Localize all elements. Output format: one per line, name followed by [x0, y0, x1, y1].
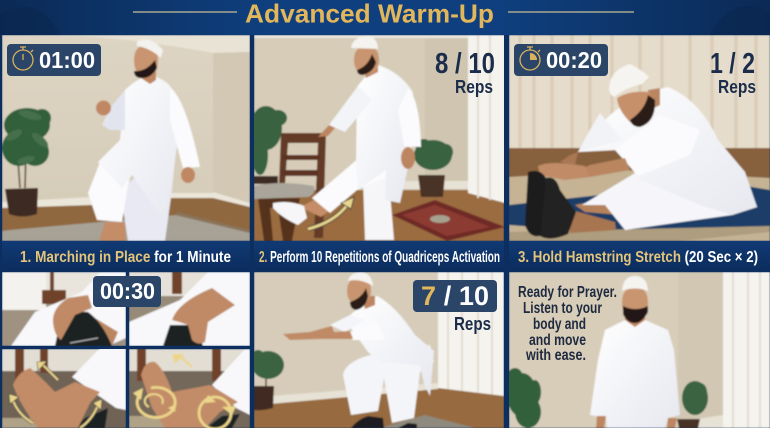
- timer badge: 00:20: 00:20: [546, 47, 602, 73]
- closing message: Listen to your: [523, 300, 602, 317]
- rep counter: 8 / 10: Reps: [455, 77, 493, 97]
- caption: step 1: [2, 241, 250, 270]
- closing message: and move: [529, 332, 586, 349]
- closing message: Ready for Prayer.: [518, 284, 617, 301]
- arrows: right foot circles: [133, 354, 236, 428]
- sub-panel: hand on left foot: [2, 272, 126, 346]
- caption: step 3: 3. Hold Hamstring Stretch (20 Sec × 2): [518, 249, 758, 266]
- figure: standing man: [590, 276, 680, 428]
- timer badge: 00:20: [514, 44, 608, 76]
- caption: step 1: 1. Marching in Place for 1 Minute: [20, 249, 231, 266]
- closing message: with ease.: [525, 347, 586, 364]
- panel: quadriceps activation: [250, 35, 505, 270]
- panel: ankle mobility grid: [2, 272, 250, 428]
- closing message: [518, 284, 617, 364]
- header banner: [0, 0, 770, 35]
- rep counter badge: 7 / 10: 7 / 10: [421, 281, 489, 311]
- figure: man raising leg: [273, 36, 421, 240]
- arrow: leg raise: [308, 197, 354, 229]
- panel: marching in place: [2, 35, 250, 270]
- caption: step 2: [254, 241, 504, 270]
- icon: stopwatch with quarter fill: [520, 47, 540, 70]
- caption: step 3: [509, 241, 770, 270]
- rep counter: 1 / 2: Reps: [718, 77, 756, 97]
- figure: seated man stretching: [525, 64, 757, 239]
- panel: squats: [251, 272, 504, 428]
- timer badge: 00:30: 00:30: [100, 278, 155, 304]
- rep counter: 1 / 2: [710, 48, 756, 97]
- timer badge: 01:00: 01:00: [39, 47, 95, 73]
- closing message: body and: [533, 316, 586, 333]
- figure: squatting man: [283, 272, 434, 428]
- panel: hamstring stretch: [509, 35, 770, 270]
- rep counter: 8 / 10: [435, 48, 495, 97]
- panel: ready for prayer: [507, 272, 770, 428]
- sub-panel: left foot flexion: [2, 348, 126, 428]
- figure: marching man: [88, 40, 200, 241]
- rep counter: 1 / 2: 1 / 2: [710, 48, 755, 80]
- arrows: left foot: [9, 361, 102, 428]
- icon: stopwatch: [13, 47, 33, 70]
- sub-panel: hand on right foot: [129, 272, 250, 346]
- reps label: Reps: [454, 314, 491, 334]
- rep counter: 8 / 10: 8 / 10: [435, 48, 495, 80]
- caption: step 2: 2. Perform 10 Repetitions of Quadriceps Activation: [259, 249, 500, 266]
- sub-panel: right foot rotation: [129, 349, 250, 428]
- timer badge: 01:00: [7, 44, 101, 76]
